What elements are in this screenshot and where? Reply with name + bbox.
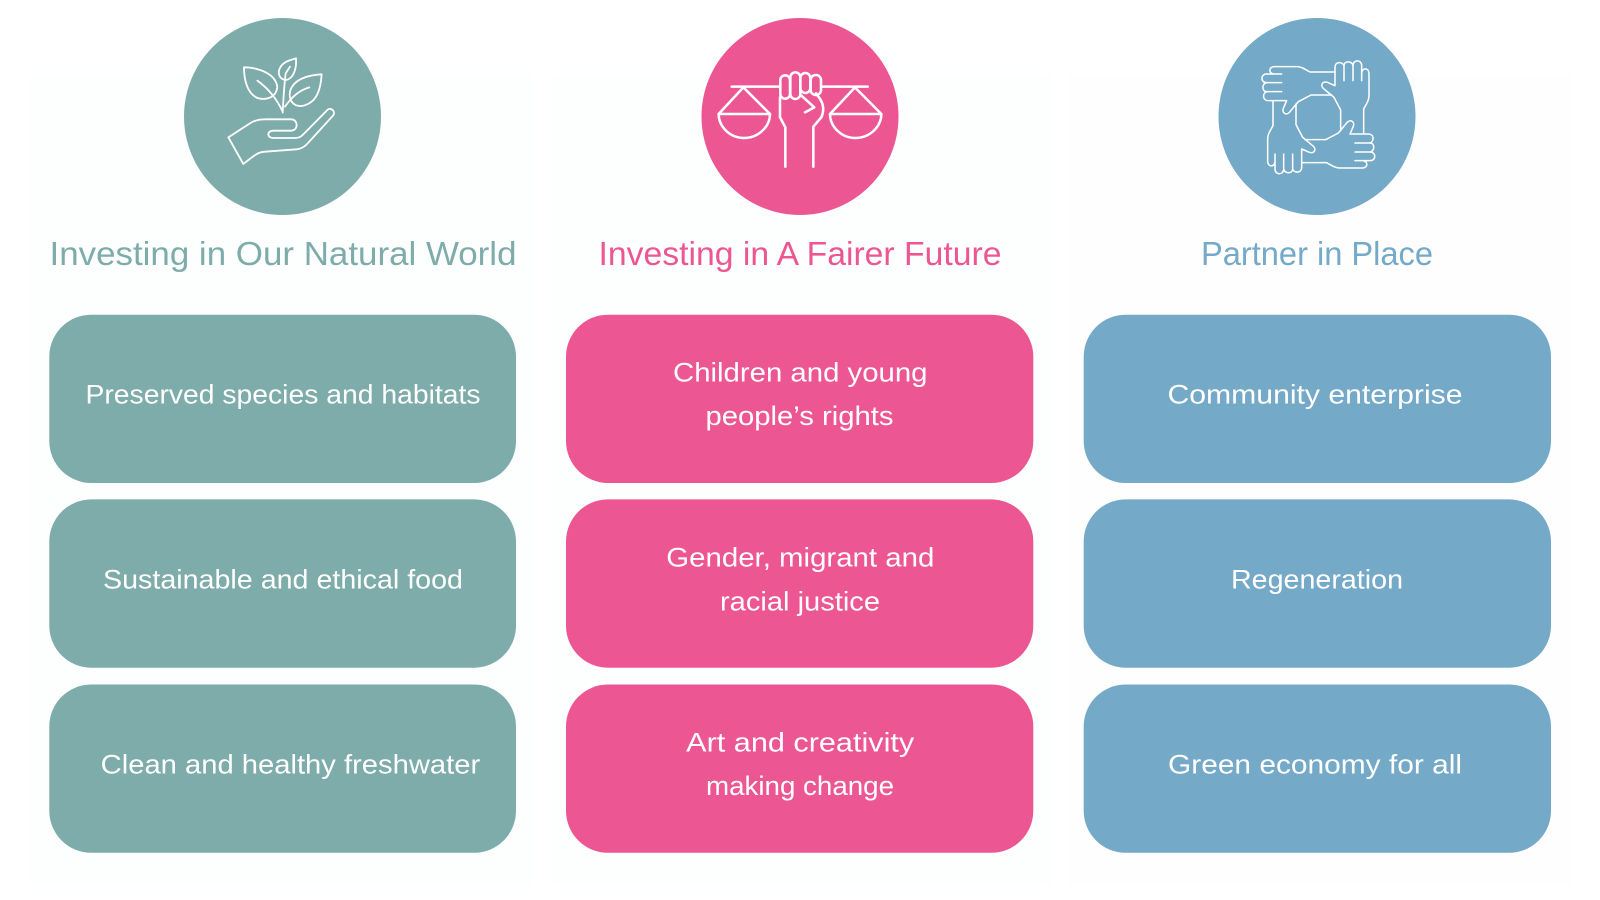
panel: Investing in A Fairer Future [566, 18, 1033, 853]
card: justice: racial justice [720, 587, 880, 617]
panel: Partner in Place [1084, 18, 1551, 853]
card: freshwater [49, 684, 516, 853]
card: food [49, 499, 516, 668]
card: art and creativity [566, 684, 1033, 853]
card: justice: Gender, migrant and [666, 543, 934, 573]
card: regeneration: Regeneration [1231, 564, 1403, 594]
heading: Investing in Our Natural World [50, 235, 516, 272]
card: justice [566, 499, 1033, 668]
icon: fist holding scales [702, 18, 898, 215]
card: young people's rights [566, 315, 1033, 483]
card: young people's rights: Children and young [673, 358, 928, 388]
card: art and creativity: making change [706, 771, 894, 801]
card: species and habitats: Preserved species and habitats [86, 379, 480, 409]
heading: Investing in A Fairer Future [598, 235, 1002, 272]
card: green economy [1084, 684, 1551, 853]
card: regeneration [1084, 499, 1551, 668]
card: community enterprise [1084, 315, 1551, 483]
panel: Investing in Our Natural World [49, 18, 517, 853]
icon: four linked hands [1218, 18, 1416, 215]
card: species and habitats [49, 315, 516, 483]
heading: Partner in Place [1201, 235, 1433, 272]
card: young people's rights: people’s rights [706, 401, 894, 431]
card: community enterprise: Community enterprise [1168, 379, 1462, 409]
card: freshwater: Clean and healthy freshwater [101, 749, 480, 779]
icon: hand holding plant [184, 18, 381, 215]
card: green economy: Green economy for all [1168, 749, 1462, 779]
card: food: Sustainable and ethical food [103, 564, 463, 594]
card: art and creativity: Art and creativity [686, 728, 915, 758]
